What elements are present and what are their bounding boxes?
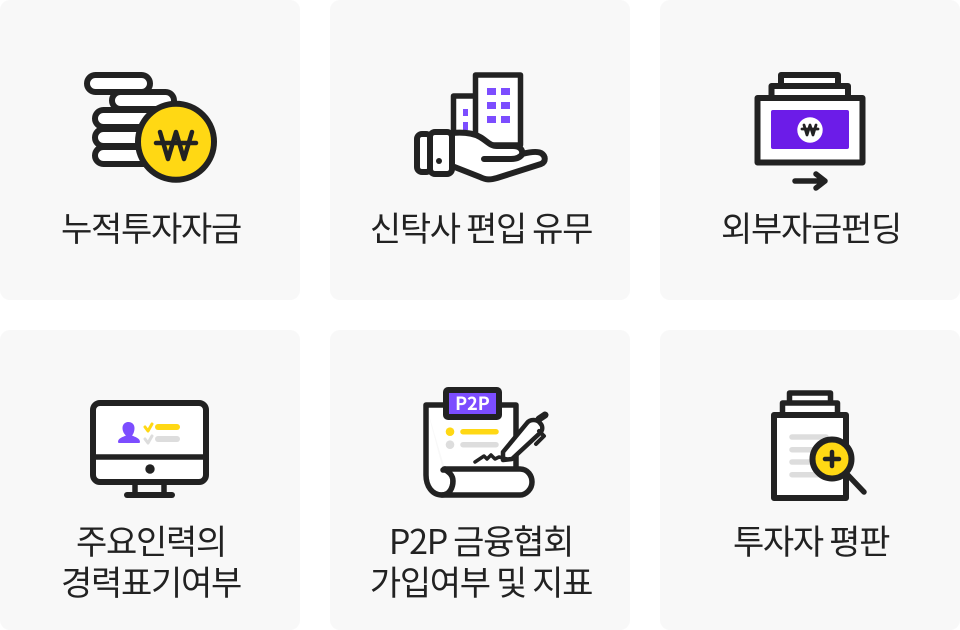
label: P2P association: 가입여부 및 지표 bbox=[370, 556, 592, 605]
icon: funding folder and arrow bbox=[758, 75, 862, 188]
panel: trust company bbox=[330, 0, 630, 300]
panel: key personnel bbox=[0, 330, 300, 630]
icon: P2P document and pen bbox=[426, 390, 545, 495]
label: external funding: 외부자금펀딩 bbox=[721, 202, 901, 251]
icon: document with magnifier bbox=[774, 393, 864, 498]
label: key personnel: 경력표기여부 bbox=[61, 556, 241, 605]
icon: coins with won bbox=[87, 75, 214, 180]
label: P2P association bbox=[370, 515, 592, 605]
label: key personnel: 주요인력의 bbox=[76, 515, 226, 564]
label: cumulative investment: 누적투자자금 bbox=[61, 202, 241, 251]
icon: hand holding buildings bbox=[417, 75, 545, 179]
label: P2P tab: P2P bbox=[455, 390, 490, 416]
panel: investor reputation bbox=[660, 330, 960, 630]
panel: external funding bbox=[660, 0, 960, 300]
label: investor reputation: 투자자 평판 bbox=[733, 515, 889, 564]
label: key personnel bbox=[61, 515, 241, 605]
label: trust company: 신탁사 편입 유무 bbox=[370, 202, 592, 251]
panel: P2P association bbox=[330, 330, 630, 630]
panel: cumulative investment bbox=[0, 0, 300, 300]
icon: monitor with profile bbox=[93, 403, 206, 495]
label: P2P association: P2P 금융협회 bbox=[389, 515, 573, 564]
